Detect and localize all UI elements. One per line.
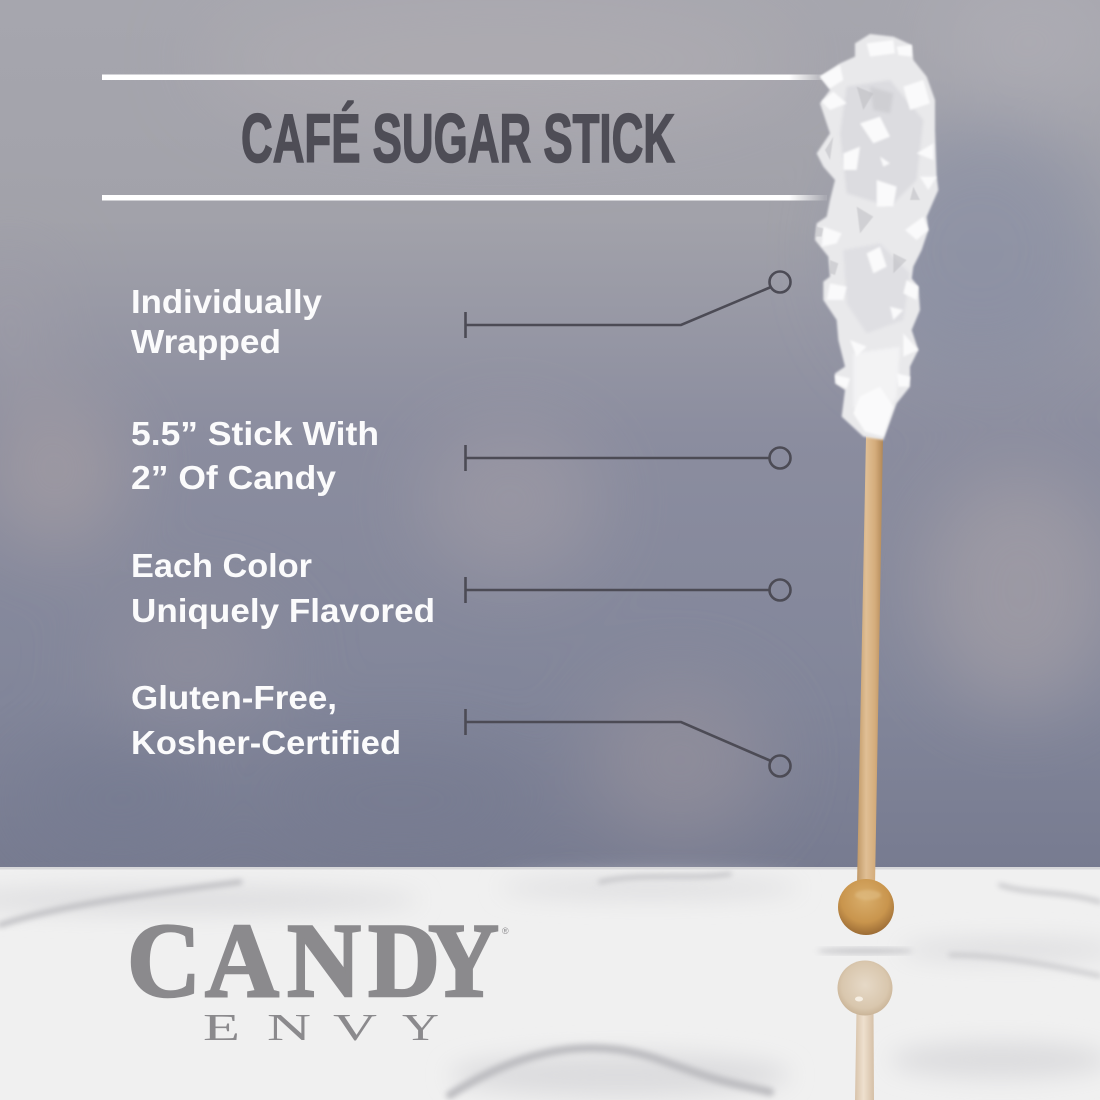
- feature text: individually wrapped: [131, 283, 323, 360]
- logo: Candy Envy: Y: [402, 1007, 439, 1049]
- wooden stick with ball: [838, 436, 894, 935]
- feature text: stick size: 5.5” Stick With: [131, 415, 379, 452]
- feature text: certifications: Gluten-Free,: [131, 679, 337, 716]
- background: marble table: [0, 867, 1100, 1100]
- connector: certifications: [466, 709, 790, 776]
- logo: Candy Envy: A: [205, 902, 279, 1019]
- feature text: individually wrapped: Individually: [131, 283, 323, 320]
- logo: Candy Envy: N: [267, 1007, 311, 1049]
- connector: stick size: [466, 445, 790, 471]
- feature text: individually wrapped: Wrapped: [131, 323, 281, 360]
- logo: Candy Envy: ®: [502, 926, 509, 936]
- feature text: flavor: Each Color: [131, 547, 312, 584]
- logo: Candy Envy: C: [127, 902, 201, 1019]
- connector: flavor: [466, 577, 790, 603]
- logo: Candy Envy: E: [203, 1007, 240, 1049]
- logo: Candy Envy: D: [368, 902, 440, 1019]
- background: blurred bokeh sky: [0, 0, 1100, 870]
- sugar crystal: [815, 34, 938, 440]
- feature text: flavor: [131, 547, 435, 629]
- logo: Candy Envy: N: [287, 902, 361, 1019]
- title: CAFÉ SUGAR STICK: [241, 100, 675, 177]
- feature text: stick size: [131, 415, 379, 496]
- feature text: stick size: 2” Of Candy: [131, 459, 337, 496]
- logo: Candy Envy: V: [333, 1007, 378, 1049]
- feature text: certifications: Kosher-Certified: [131, 724, 401, 761]
- feature text: certifications: [131, 679, 401, 761]
- connector: individually wrapped to crystal: [466, 272, 790, 338]
- title bottom rule: [102, 195, 827, 200]
- feature text: flavor: Uniquely Flavored: [131, 592, 435, 629]
- logo: Candy Envy: [127, 902, 509, 1049]
- wooden stick reflection: [817, 948, 913, 1100]
- logo: Candy Envy: Y: [428, 902, 499, 1019]
- title top rule: [102, 74, 827, 80]
